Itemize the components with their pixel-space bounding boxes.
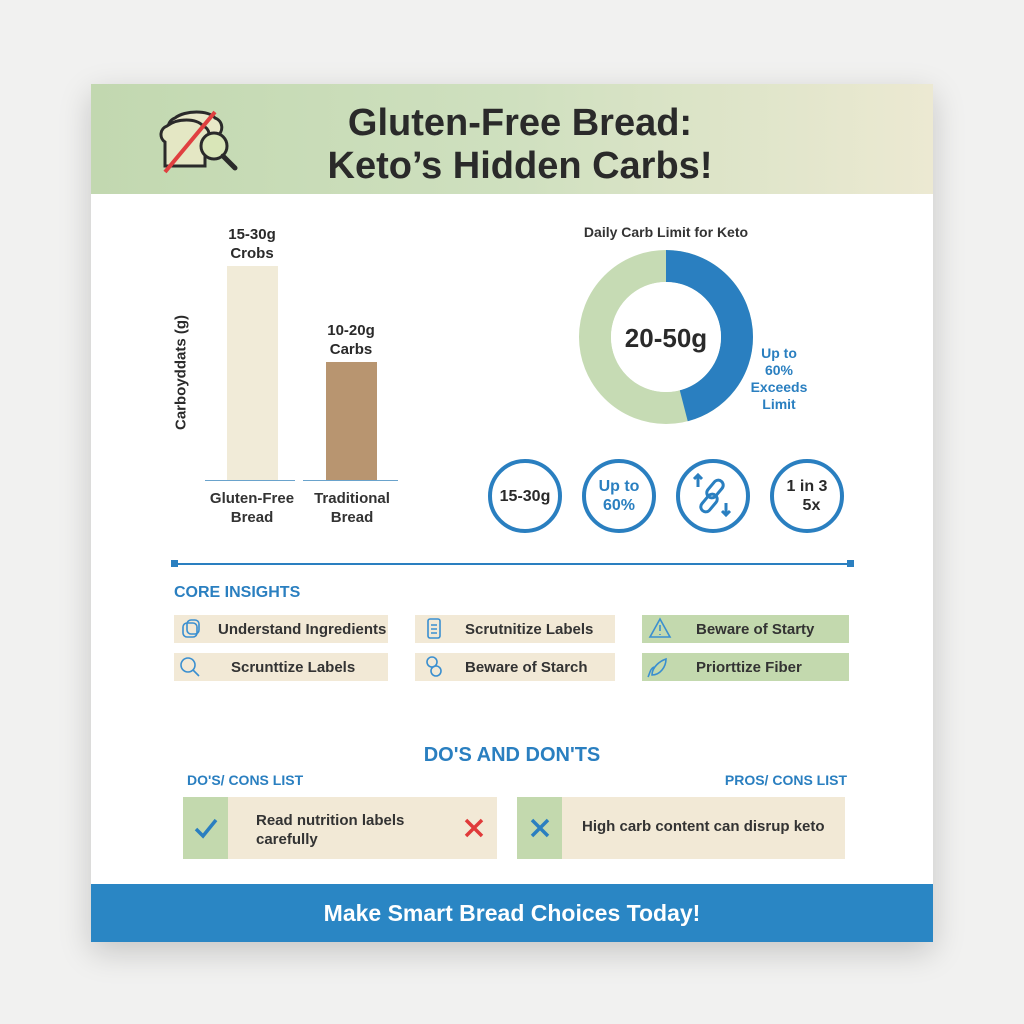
do's and don'ts heading: DO'S AND DON'TS: [424, 744, 600, 766]
insights grid: [174, 615, 849, 681]
callout: Limit: [762, 396, 796, 412]
do card: [183, 797, 497, 859]
callout: Exceeds: [751, 379, 807, 395]
insights grid: Scrutnitize Labels: [465, 620, 593, 638]
card: DO'S/ CONS LIST: [187, 772, 303, 788]
donut chart: Daily Carb Limit for Keto: [584, 224, 748, 240]
stat circles: 15-30g: [500, 488, 550, 504]
insights grid: Priorttize Fiber: [696, 658, 802, 676]
bar chart: 15-30g: [228, 226, 276, 243]
icon: crossed bread magnifier: [159, 110, 238, 174]
stat circles: 60%: [603, 497, 635, 514]
callout: 60%: [765, 362, 793, 378]
insights grid: Beware of Starch: [465, 658, 588, 676]
footer banner: Make Smart Bread Choices Today!: [324, 900, 700, 926]
insights grid: Scrunttize Labels: [231, 658, 355, 676]
insights grid: Understand Ingredients: [218, 620, 386, 638]
title: Gluten-Free Bread:: [348, 102, 692, 144]
insights grid: Beware of Starty: [696, 620, 814, 638]
do card: Read nutrition labels: [256, 812, 404, 829]
footer banner: [91, 884, 933, 942]
stat circles: Up to: [599, 478, 639, 495]
bar chart: 10-20g: [327, 322, 375, 339]
card: PROS/ CONS LIST: [725, 772, 847, 788]
do card: carefully: [256, 831, 318, 848]
card: [91, 84, 933, 942]
bar: gluten-free: [227, 266, 278, 480]
donut chart: [579, 224, 807, 424]
don't card: High carb content can disrup keto: [582, 818, 825, 835]
bar chart: Traditional: [314, 490, 390, 507]
callout: [751, 345, 807, 412]
title: [328, 102, 712, 187]
header: [91, 84, 933, 194]
bar chart: Carbs: [330, 341, 372, 358]
bar chart: Crobs: [230, 245, 274, 262]
don't card: [517, 797, 845, 859]
stat circles: 5x: [803, 497, 820, 514]
core insights heading: CORE INSIGHTS: [174, 584, 300, 601]
title: Keto’s Hidden Carbs!: [328, 145, 712, 187]
icon: link: [676, 459, 750, 533]
donut chart: 20-50g: [625, 323, 707, 353]
bar: traditional: [326, 362, 377, 480]
y axis label: Carboyddats (g): [172, 315, 190, 430]
x labels: Gluten-Free: [210, 490, 294, 507]
stat circles: [488, 459, 844, 533]
divider: [174, 563, 850, 565]
stat circles: 1 in 3: [787, 478, 827, 495]
x labels: Bread: [231, 509, 273, 526]
bar chart: [172, 226, 398, 526]
bar chart: Bread: [331, 509, 373, 526]
callout: Up to: [761, 345, 797, 361]
x labels: [210, 490, 294, 526]
